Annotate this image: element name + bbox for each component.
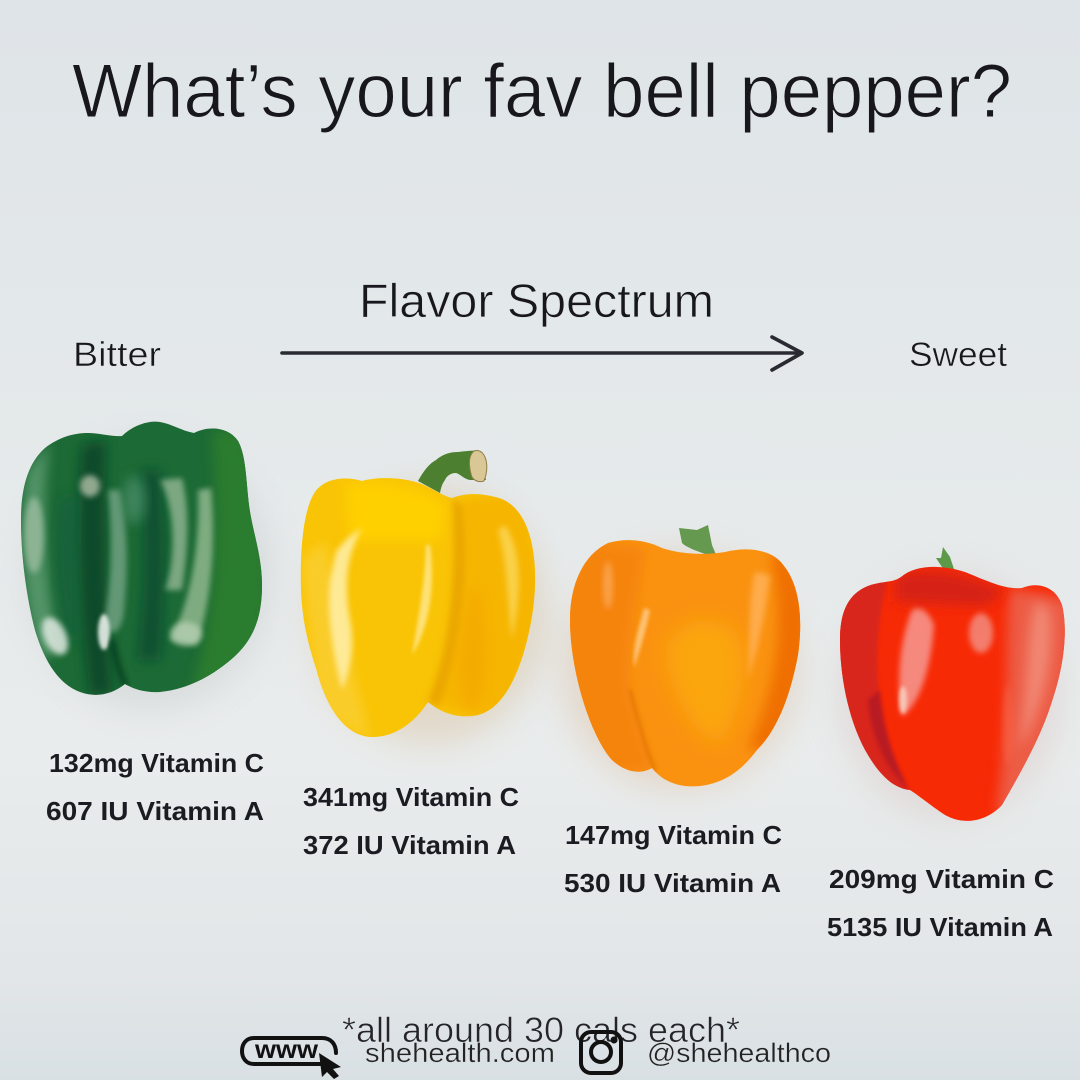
bottom crease [112, 640, 126, 686]
nutrition: orange pepper: 530 IU Vitamin A [564, 868, 781, 898]
website address: shehealth.com [365, 1038, 555, 1068]
title: What’s your fav bell pepper? [72, 49, 1012, 134]
nutrition: yellow pepper: 341mg Vitamin C [303, 782, 519, 812]
yellow pepper stem [418, 450, 487, 493]
nutrition: green pepper: 132mg Vitamin C [49, 748, 264, 778]
nutrition: red pepper [827, 864, 1054, 942]
label: bitter: Bitter [73, 336, 161, 374]
nutrition: green pepper [46, 748, 264, 826]
red bell pepper [828, 547, 1075, 821]
right lobe tone [428, 494, 536, 716]
flavor spectrum heading: Flavor Spectrum [359, 274, 714, 327]
icon: website [242, 1034, 341, 1079]
left lobe [840, 582, 912, 791]
orange bell pepper [560, 525, 810, 786]
soft pepper shadows [28, 440, 1062, 820]
green bell pepper [21, 422, 270, 695]
red pepper stem [936, 547, 955, 572]
nutrition: red pepper: 209mg Vitamin C [829, 864, 1054, 894]
nutrition: yellow pepper [303, 782, 519, 860]
icon: website: www [254, 1034, 319, 1064]
nutrition: yellow pepper: 372 IU Vitamin A [303, 830, 516, 860]
instagram handle: @shehealthco [647, 1038, 831, 1068]
footnote: *all around 30 cals each* [342, 1011, 740, 1050]
label: sweet: Sweet [909, 336, 1008, 374]
grey highlights [105, 490, 127, 632]
yellow bell pepper [301, 450, 545, 740]
orange pepper stem [679, 525, 717, 557]
arrow: flavor spectrum [282, 337, 802, 370]
nutrition: orange pepper: 147mg Vitamin C [565, 820, 782, 850]
nutrition: green pepper: 607 IU Vitamin A [46, 796, 264, 826]
right coral lobe [996, 588, 1075, 815]
dark bands [79, 440, 112, 695]
nutrition: red pepper: 5135 IU Vitamin A [827, 912, 1053, 942]
nutrition: orange pepper [564, 820, 782, 898]
icon: instagram [581, 1032, 621, 1073]
right lobe mid-green [190, 430, 270, 692]
pale left side [22, 440, 60, 660]
